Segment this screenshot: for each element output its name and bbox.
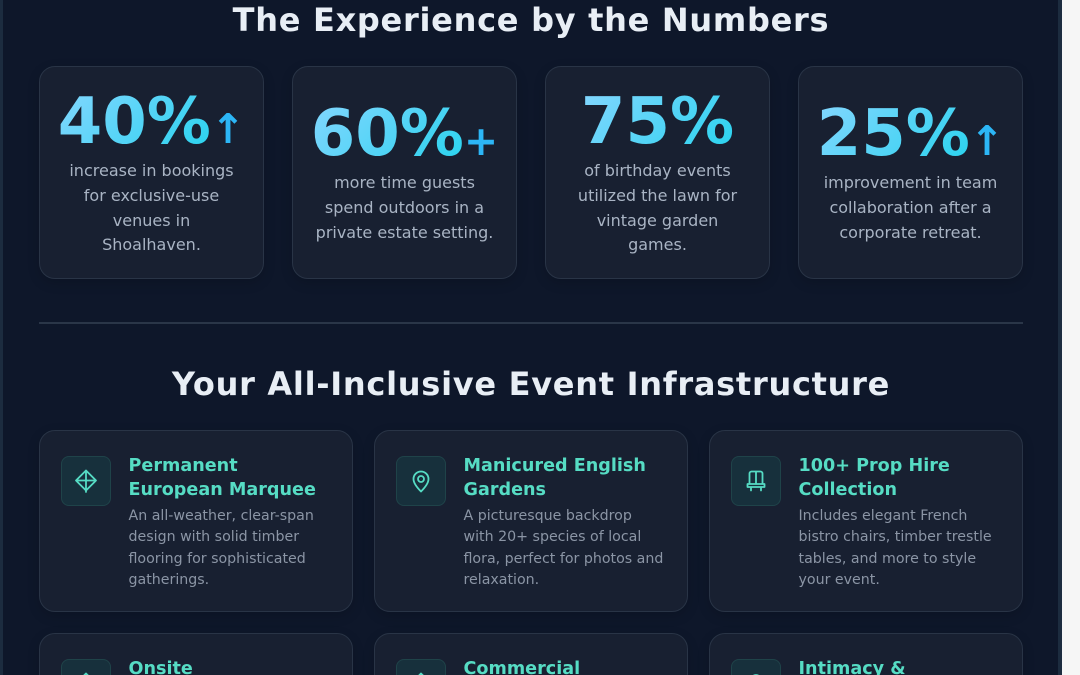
card title: Manicured English Gardens <box>464 456 646 500</box>
title: experience by the numbers: The Experience by the Numbers <box>233 1 829 39</box>
icon: intimacy <box>731 659 781 675</box>
stat card: 40% <box>39 66 264 279</box>
card: gardens <box>374 430 688 612</box>
stat card: 75%: 75% <box>581 85 734 159</box>
card text: Includes elegant French bistro chairs, timber trestle tables, and more to style your event. <box>798 508 992 588</box>
card: props <box>709 430 1023 612</box>
icon: chair <box>731 456 781 506</box>
stat card: 75% <box>545 66 770 279</box>
icon: onsite <box>61 659 111 675</box>
card title: Permanent European Marquee <box>128 456 316 500</box>
stat card: 40%: increase in bookings for exclusive-use venues in Shoalhaven. <box>69 161 234 254</box>
card: intimacy <box>709 633 1023 675</box>
card: commercial <box>374 633 688 675</box>
stat card: 25%: improvement in team collaboration after a corporate retreat. <box>824 173 997 242</box>
card: marquee <box>39 430 353 612</box>
stat card: 75%: of birthday events utilized the lawn for vintage garden games. <box>578 161 737 254</box>
icon: commercial <box>396 659 446 675</box>
stat card: 25%: 25%↑ <box>817 97 1004 171</box>
stat card: 60%: more time guests spend outdoors in a private estate setting. <box>316 173 493 242</box>
card text: An all-weather, clear-span design with solid timber flooring for sophisticated gatherings. <box>128 508 314 588</box>
icon: map pin <box>396 456 446 506</box>
stat card: 25% <box>798 66 1023 279</box>
card: onsite <box>39 633 353 675</box>
stat card: 60%: 60%+ <box>311 97 498 171</box>
stat card: 60% <box>292 66 517 279</box>
stat card: 40%: 40%↑ <box>58 85 245 159</box>
card title: 100+ Prop Hire Collection <box>798 456 950 500</box>
icon: diamond marquee <box>61 456 111 506</box>
card text: A picturesque backdrop with 20+ species of local flora, perfect for photos and relaxation. <box>464 508 663 588</box>
heading: event infrastructure: Your All-Inclusive Event Infrastructure <box>172 365 890 403</box>
